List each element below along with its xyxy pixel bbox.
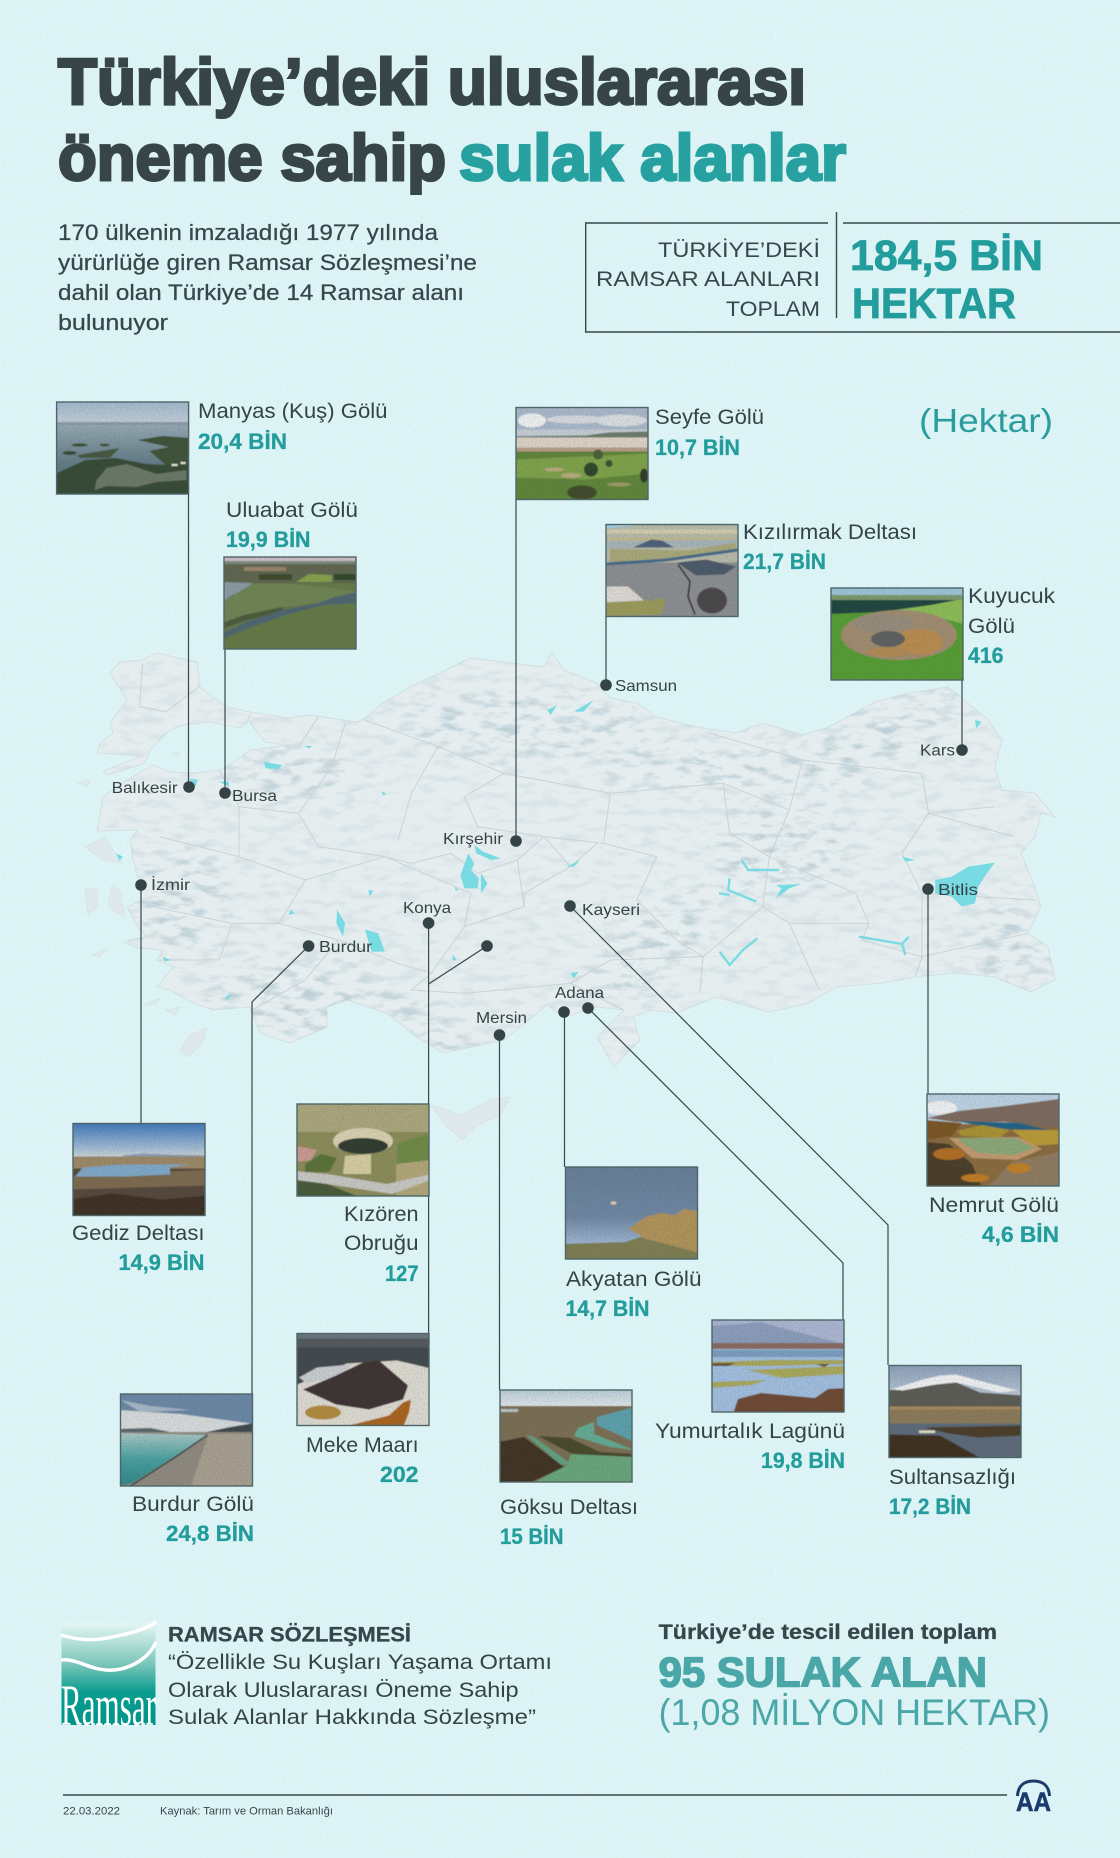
label: Kuyucuk: 416	[968, 643, 1004, 668]
label: Uluabat: Uluabat Gölü	[226, 499, 358, 522]
photo: Nemrut	[925, 1092, 1061, 1188]
label: Akyatan: Akyatan Gölü	[566, 1268, 702, 1291]
label: Manyas: 20,4 BİN	[198, 429, 287, 454]
photo: Manyas	[55, 400, 191, 496]
label: Kuyucuk	[968, 585, 1056, 668]
label: Seyfe	[655, 406, 764, 460]
city labels: Kayseri	[582, 902, 640, 919]
photo: Yumurtalık	[710, 1318, 846, 1414]
city labels: Adana	[555, 985, 604, 1002]
city labels: Samsun	[615, 678, 677, 695]
city labels: Bursa	[232, 788, 277, 805]
label: Kızılırmak: 21,7 BİN	[743, 549, 826, 574]
text: Ramsar convention: Sulak Alanlar Hakkında Sözleşme”	[168, 1706, 536, 1729]
text: registered total: Türkiye’de tescil edilen toplam	[659, 1621, 997, 1644]
label: Nemrut: Nemrut Gölü	[929, 1194, 1059, 1217]
footer: 22.03.2022	[63, 1806, 120, 1818]
title: öneme sahip	[58, 121, 446, 194]
text: registered total: 95 SULAK ALAN	[659, 1649, 987, 1696]
label: Göksu	[500, 1496, 638, 1549]
label: Seyfe: Seyfe Gölü	[655, 406, 764, 429]
photo: Seyfe	[514, 406, 650, 502]
city labels: Mersin	[476, 1010, 527, 1027]
title: Türkiye’deki uluslararası	[58, 45, 806, 118]
city labels: Kars	[920, 743, 955, 760]
label: Kuyucuk: Kuyucuk	[968, 585, 1056, 608]
intro paragraph: dahil olan Türkiye’de 14 Ramsar alanı	[58, 280, 464, 305]
label: Uluabat	[226, 499, 358, 552]
intro paragraph	[58, 220, 477, 335]
intro paragraph: bulunuyor	[58, 310, 168, 335]
total box: TÜRKİYE’DEKİ	[658, 239, 820, 262]
leader lines and dots	[135, 494, 968, 1394]
map: Turkey	[60, 640, 1070, 1140]
label: Sultansazlığı	[889, 1466, 1016, 1519]
label: Uluabat: 19,9 BİN	[226, 527, 310, 552]
icon: Ramsar logo	[61, 1622, 156, 1738]
label: Manyas	[198, 400, 388, 454]
title	[58, 45, 846, 194]
city labels: İzmir	[151, 875, 191, 894]
label: Manyas: Manyas (Kuş) Gölü	[198, 400, 388, 423]
text: registered total: (1,08 MİLYON HEKTAR)	[659, 1692, 1050, 1733]
total box: 184,5 BİN	[850, 232, 1043, 280]
total box: TOPLAM	[726, 298, 820, 321]
label: Meke: 202	[380, 1462, 418, 1487]
province borders	[116, 663, 1035, 1010]
city labels: Burdur	[319, 939, 373, 956]
label: Kızören: Kızören	[344, 1203, 418, 1226]
label: Burdur: Burdur Gölü	[132, 1493, 254, 1516]
text: registered total	[659, 1621, 1050, 1733]
intro paragraph: yürürlüğe giren Ramsar Sözleşmesi’ne	[58, 250, 477, 275]
total box	[586, 212, 1120, 332]
title: sulak alanlar	[459, 121, 846, 194]
label: Göksu: 15 BİN	[500, 1524, 564, 1549]
photo: Uluabat	[222, 555, 358, 651]
label: Sultansazlığı: 17,2 BİN	[889, 1494, 971, 1519]
text: Ramsar convention: “Özellikle Su Kuşları Yaşama Ortamı	[168, 1651, 552, 1674]
label: Kuyucuk: Gölü	[968, 615, 1015, 638]
icon: Ramsar logo: Ramsar	[61, 1673, 156, 1738]
total box: HEKTAR	[852, 280, 1016, 328]
label: Burdur: 24,8 BİN	[166, 1521, 254, 1546]
photo: Sultansazlığı	[887, 1364, 1023, 1460]
label: Nemrut	[929, 1194, 1059, 1247]
footer	[63, 1795, 1007, 1818]
label: Kızören: Obruğu	[344, 1232, 418, 1255]
label: Seyfe: 10,7 BİN	[655, 435, 740, 460]
city labels: Konya	[403, 900, 451, 917]
label: Kızılırmak	[743, 521, 917, 574]
label: Kızılırmak: Kızılırmak Deltası	[743, 521, 917, 544]
photo: Kızören	[295, 1102, 431, 1198]
photo: Akyatan	[564, 1165, 700, 1261]
label: Kızören	[344, 1203, 418, 1286]
lakes	[116, 700, 995, 1000]
label: Gediz: 14,9 BİN	[118, 1250, 204, 1275]
text: Ramsar convention: Olarak Uluslararası Öneme Sahip	[168, 1679, 519, 1702]
intro paragraph: 170 ülkenin imzaladığı 1977 yılında	[58, 220, 439, 245]
label: Meke	[306, 1434, 418, 1487]
label: Burdur	[132, 1493, 254, 1546]
photo: Meke	[295, 1332, 431, 1428]
label: Yumurtalık	[655, 1420, 845, 1473]
label: Göksu: Göksu Deltası	[500, 1496, 638, 1519]
label: Gediz	[72, 1222, 204, 1275]
photo: Kuyucuk	[829, 586, 965, 682]
photo: Kızılırmak	[604, 522, 740, 618]
label: Akyatan: 14,7 BİN	[566, 1296, 650, 1321]
photo: Göksu	[498, 1388, 634, 1484]
icon: AA logo: AA	[1016, 1787, 1051, 1817]
text: Ramsar convention: RAMSAR SÖZLEŞMESİ	[168, 1624, 411, 1647]
label: Nemrut: 4,6 BİN	[982, 1222, 1059, 1247]
label: Yumurtalık: 19,8 BİN	[761, 1448, 845, 1473]
city labels	[112, 678, 978, 1027]
total box: RAMSAR ALANLARI	[596, 268, 820, 291]
unit note: (Hektar)	[919, 402, 1053, 439]
label: Meke: Meke Maarı	[306, 1434, 418, 1457]
label: Gediz: Gediz Deltası	[72, 1222, 204, 1245]
city labels: Bitlis	[938, 882, 978, 899]
text: Ramsar convention	[168, 1624, 552, 1729]
label: Akyatan	[566, 1268, 702, 1321]
label: Sultansazlığı: Sultansazlığı	[889, 1466, 1016, 1489]
islands	[78, 752, 510, 1140]
city labels: Balıkesir	[112, 780, 178, 797]
photo: Gediz	[71, 1122, 207, 1218]
footer: Kaynak: Tarım ve Orman Bakanlığı	[160, 1806, 333, 1818]
label: Kızören: 127	[385, 1261, 418, 1286]
label: Yumurtalık: Yumurtalık Lagünü	[655, 1420, 845, 1443]
city labels: Kırşehir	[443, 831, 504, 848]
photo: Burdur	[118, 1392, 254, 1488]
